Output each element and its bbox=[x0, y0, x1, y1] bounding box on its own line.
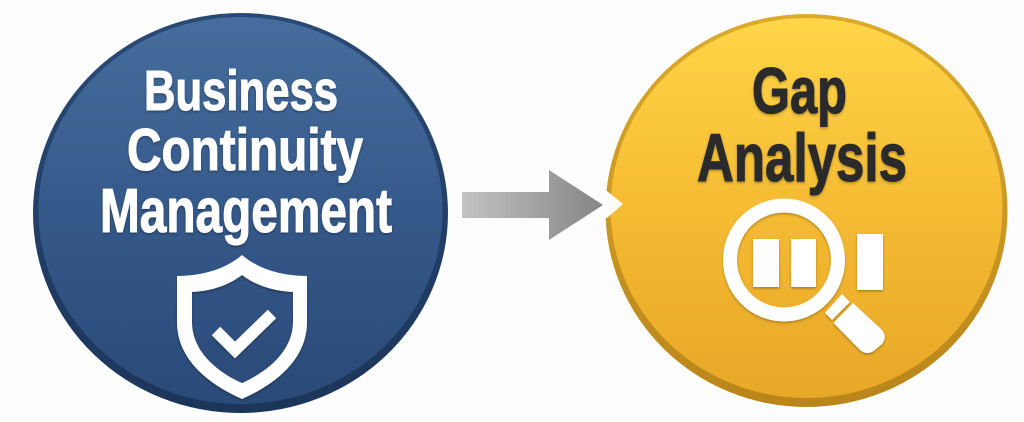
icon: magnifying glass over bars bbox=[730, 206, 885, 353]
heading: business continuity management: Business bbox=[144, 59, 338, 123]
blue circle face bbox=[38, 17, 442, 404]
heading: business continuity management bbox=[100, 59, 392, 246]
bars bbox=[753, 234, 883, 290]
icon: shield with check mark bbox=[177, 255, 307, 399]
heading: gap analysis: Analysis bbox=[697, 120, 907, 196]
gold circle face bbox=[610, 18, 1002, 398]
panel: gap analysis bbox=[604, 14, 1008, 407]
heading: gap analysis: Gap bbox=[752, 54, 847, 127]
heading: business continuity management: Management bbox=[100, 177, 392, 246]
panel: business continuity management bbox=[33, 13, 448, 413]
gold circle edge bbox=[606, 14, 1008, 407]
arrow: gray connector pointing right bbox=[462, 170, 603, 240]
handle grip bbox=[834, 303, 885, 353]
heading: gap analysis bbox=[697, 54, 907, 196]
lens ring bbox=[730, 206, 838, 314]
handle collar bbox=[825, 294, 850, 320]
blue circle edge bbox=[33, 13, 448, 413]
heading: business continuity management: Continuity bbox=[127, 117, 363, 183]
notch in circle at arrow tip bbox=[604, 191, 623, 218]
